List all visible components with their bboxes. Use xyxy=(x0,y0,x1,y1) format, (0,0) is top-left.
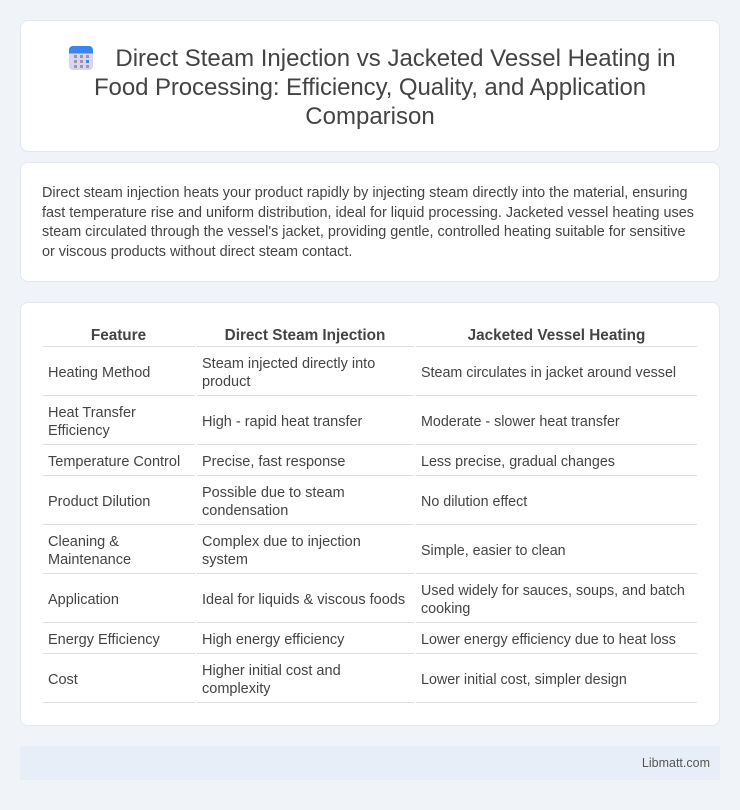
row: cleaning and maintenance: Cleaning & xyxy=(48,534,119,550)
row: energy efficiency: Lower energy efficiency due to heat loss xyxy=(421,632,676,648)
row: cleaning and maintenance xyxy=(43,534,697,574)
row: product dilution: No dilution effect xyxy=(421,494,527,510)
title: Direct Steam Injection vs Jacketed Vessel Heating in xyxy=(115,45,676,72)
header row: Jacketed Vessel Heating xyxy=(468,327,645,344)
row: temperature control xyxy=(43,454,697,476)
row: temperature control: Temperature Control xyxy=(48,454,180,470)
title: Comparison xyxy=(305,103,435,130)
panel: title card xyxy=(20,20,720,152)
row: cost: Cost xyxy=(48,672,78,688)
row: heat transfer efficiency: Heat Transfer xyxy=(48,405,136,421)
row: energy efficiency: Energy Efficiency xyxy=(48,632,160,648)
row: energy efficiency: High energy efficiency xyxy=(202,632,344,648)
header row xyxy=(43,327,697,347)
row: cost: Lower initial cost, simpler design xyxy=(421,672,627,688)
header row: Feature xyxy=(91,327,146,344)
row: heating method: Heating Method xyxy=(48,365,150,381)
icon: calendar xyxy=(69,46,93,70)
row: cleaning and maintenance: system xyxy=(202,552,248,568)
row: heating method: Steam circulates in jacket around vessel xyxy=(421,365,676,381)
panel: summary card xyxy=(20,162,720,282)
text block: summary xyxy=(42,185,694,260)
row: cost: Higher initial cost and xyxy=(202,663,341,679)
row: product dilution: Possible due to steam xyxy=(202,485,345,501)
title xyxy=(94,45,676,130)
row: heat transfer efficiency: Efficiency xyxy=(48,423,110,439)
row: temperature control: Precise, fast response xyxy=(202,454,345,470)
row: heat transfer efficiency xyxy=(43,405,697,445)
row: heating method: Steam injected directly into product xyxy=(202,356,375,390)
panel: comparison table card xyxy=(20,302,720,726)
row: application: Ideal for liquids & viscous foods xyxy=(202,592,405,608)
row: cleaning and maintenance: Maintenance xyxy=(48,552,131,568)
row: product dilution: condensation xyxy=(202,503,288,519)
row: energy efficiency xyxy=(43,632,697,654)
row: heat transfer efficiency: High - rapid heat transfer xyxy=(202,414,362,430)
row: cost: complexity xyxy=(202,681,270,697)
row: temperature control: Less precise, gradual changes xyxy=(421,454,615,470)
header row: Direct Steam Injection xyxy=(225,327,385,344)
row: cost xyxy=(43,663,697,703)
row: cleaning and maintenance: Simple, easier to clean xyxy=(421,543,566,559)
row: heating method xyxy=(43,356,697,396)
row: heat transfer efficiency: Moderate - slower heat transfer xyxy=(421,414,620,430)
footer bar xyxy=(20,746,720,780)
row: application: cooking xyxy=(421,601,470,617)
row: application: Used widely for sauces, soups, and batch xyxy=(421,583,685,599)
row: product dilution: Product Dilution xyxy=(48,494,150,510)
comparison table xyxy=(43,327,697,703)
text block: summary: steam circulated through the vessel's jacket, providing gentle, controlled heating suitable for sensitive xyxy=(42,224,686,240)
row: cleaning and maintenance: Complex due to injection xyxy=(202,534,361,550)
text block: summary: Direct steam injection heats your product rapidly by injecting steam directly into the material, ensuring xyxy=(42,185,688,201)
text block: summary: or viscous products without direct steam contact. xyxy=(42,244,352,260)
row: application: Application xyxy=(48,592,119,608)
footer credit: Libmatt.com xyxy=(642,756,710,770)
row: product dilution xyxy=(43,485,697,525)
title: Food Processing: Efficiency, Quality, and Application xyxy=(94,74,646,101)
text block: summary: fast temperature rise and uniform distribution, ideal for liquid processing. Jacketed vessel heating uses xyxy=(42,204,694,220)
row: application xyxy=(43,583,697,623)
